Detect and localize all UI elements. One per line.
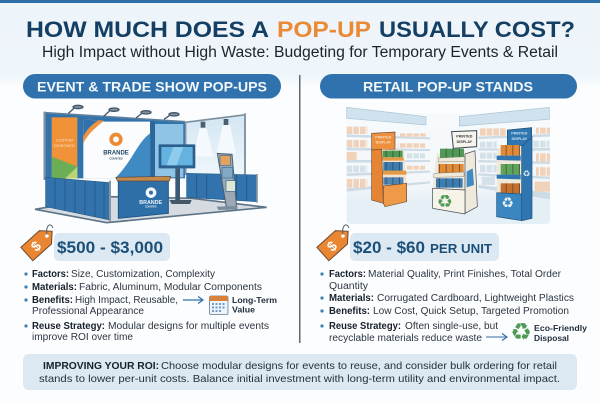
icon: price tag right: $ <box>324 237 340 255</box>
blue stand <box>507 128 532 148</box>
callout: improving your roi: IMPROVING YOUR ROI: <box>43 360 159 372</box>
label: eco-friendly disposal <box>534 323 587 343</box>
callout: improving your roi: Choose modular designs for events to reuse, and consider bulk ordering for retail <box>161 360 557 372</box>
price chip: retail cost: PER UNIT <box>430 241 492 256</box>
icon: price tag left: $ <box>28 237 44 255</box>
event details list: Modular designs for multiple events <box>108 321 269 332</box>
title: POP-UP <box>277 17 371 42</box>
icon: price tag left <box>21 222 61 261</box>
illustration: retail display stands: DISPLAY <box>512 137 528 141</box>
illustration: retail display stands <box>347 107 550 224</box>
label: eco-friendly disposal: Disposal <box>534 333 569 343</box>
illustration: retail display stands: PRINTED <box>375 135 392 139</box>
panel divider <box>299 75 300 343</box>
event details list <box>24 269 269 343</box>
event details list: Factors: <box>32 269 69 280</box>
heading: event and trade show pop-ups <box>23 74 281 98</box>
white stand <box>452 131 477 148</box>
orange stand <box>372 132 395 150</box>
retail details list <box>320 269 574 344</box>
event details list: Benefits: <box>32 295 73 306</box>
icon: price tag right <box>317 222 357 261</box>
retail details list: Factors: <box>329 269 366 280</box>
arrow: waste to eco-friendly disposal <box>486 334 507 340</box>
retail details list: Low Cost, Quick Setup, Targeted Promotion <box>373 306 569 317</box>
event details list: Fabric, Aluminum, Modular Components <box>79 282 262 293</box>
price chip: event cost <box>54 233 170 261</box>
retail details list: recyclable materials reduce waste <box>329 333 482 344</box>
illustration: retail display stands: ♻ <box>437 191 453 212</box>
retail details list: Benefits: <box>329 306 370 317</box>
price chip: retail cost <box>350 233 499 261</box>
label: eco-friendly disposal: Eco-Friendly <box>534 323 587 333</box>
event details list: improve ROI over time <box>32 332 133 343</box>
event details list: Size, Customization, Complexity <box>71 269 215 280</box>
illustration: retail display stands: ♻ <box>523 170 531 180</box>
retail details list: Reuse Strategy: <box>329 321 401 332</box>
illustration: retail display stands: ♻ <box>501 195 514 211</box>
illustration: trade show booth: BRANDE <box>103 151 129 157</box>
arrow: benefits to long-term value <box>183 296 203 304</box>
label: long-term value <box>232 295 277 314</box>
title <box>26 17 575 42</box>
illustration: retail display stands: DISPLAY <box>376 140 392 144</box>
icon: recycle symbol: ♻ <box>510 318 532 346</box>
illustration: trade show booth: DESIGNED <box>54 143 75 148</box>
illustration: retail display stands: PRINTED <box>511 132 528 136</box>
retail details list: Materials: <box>329 293 374 304</box>
event details list: Materials: <box>32 282 77 293</box>
event details list: Reuse Strategy: <box>32 321 105 332</box>
retail details list: Corrugated Cardboard, Lightweight Plastics <box>377 293 574 304</box>
price chip: retail cost: $20 - $60 <box>353 238 425 257</box>
illustration: retail display stands: DISPLAY <box>457 140 473 144</box>
event details list: High Impact, Reusable, <box>75 295 178 306</box>
illustration: trade show booth: CUSTOM <box>56 138 73 143</box>
illustration: trade show booth: BRANDE <box>139 200 163 206</box>
illustration: trade show booth <box>35 105 267 223</box>
label: long-term value: Long-Term <box>232 295 277 305</box>
title: USUALLY COST? <box>379 17 575 42</box>
heading: retail pop-up stands: RETAIL POP-UP STANDS <box>363 78 533 94</box>
heading: retail pop-up stands <box>320 74 577 98</box>
price chip: event cost: $500 - $3,000 <box>57 238 163 257</box>
heading: event and trade show pop-ups: EVENT & TRADE SHOW POP-UPS <box>37 78 267 94</box>
illustration: retail display stands: PRINTED <box>456 135 473 139</box>
retail details list: Material Quality, Print Finishes, Total Order <box>368 269 562 280</box>
callout: improving your roi <box>23 354 577 390</box>
callout: improving your roi: stands to lower per-unit costs. Balance initial investment with long-term utility and environmental impact. <box>39 373 560 385</box>
illustration: trade show booth: COUNTED <box>145 207 157 209</box>
icon: calendar <box>210 296 228 314</box>
label: long-term value: Value <box>232 304 255 314</box>
illustration: trade show booth: COUNTED <box>109 156 123 160</box>
retail details list: Often single-use, but <box>405 321 498 332</box>
retail details list: Quantity <box>329 281 368 292</box>
top accent bar <box>0 0 600 3</box>
title: HOW MUCH DOES A <box>26 17 269 42</box>
subtitle: High Impact without High Waste: Budgeting for Temporary Events & Retail <box>42 44 558 61</box>
event details list: Professional Appearance <box>32 306 144 317</box>
header band <box>0 3 600 87</box>
